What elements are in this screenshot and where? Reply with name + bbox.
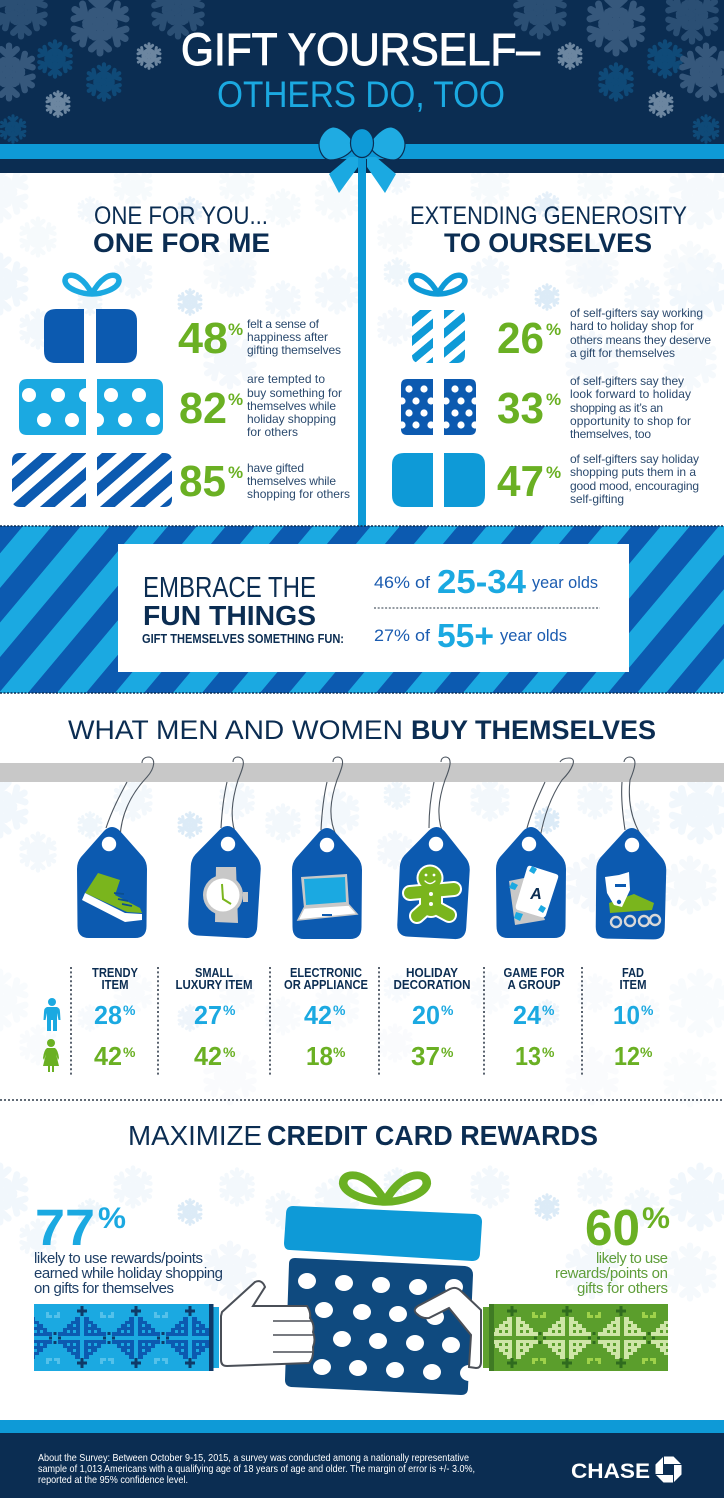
column: trendy item: TRENDY: [92, 965, 138, 980]
stat: 47 percent: 47: [497, 457, 544, 506]
stat: 33 percent: [497, 374, 691, 441]
icon: gift stack: [12, 275, 172, 507]
column: game for a group: %: [542, 1044, 555, 1060]
icon: watch: [203, 867, 248, 923]
heading: maximize credit card rewards: CREDIT CARD REWARDS: [267, 1120, 598, 1151]
heading: ONE FOR YOU...: [94, 202, 268, 230]
column: small luxury item: %: [223, 1002, 236, 1018]
survey note: About the Survey: Between October 9-15, 2015, a survey was conducted among a nationally representative: [38, 1452, 469, 1464]
column: electronic or appliance: %: [333, 1002, 346, 1018]
stat: 48 percent: %: [228, 320, 243, 339]
stat: 60 percent: 60: [585, 1199, 640, 1256]
stat: 60 percent: [555, 1199, 670, 1297]
column: fad item: ITEM: [620, 977, 646, 992]
stat: 26 percent: hard to holiday shop for: [570, 319, 694, 333]
panel: embrace the fun things: [0, 526, 724, 693]
tag: small luxury item: [187, 757, 263, 939]
column: fad item: %: [640, 1044, 653, 1060]
column: electronic or appliance: [284, 965, 368, 1071]
stat: 48 percent: happiness after: [247, 330, 328, 344]
stat: 82 percent: 82: [179, 384, 227, 433]
column: electronic or appliance: OR APPLIANCE: [284, 977, 368, 992]
stat: 82 percent: for others: [247, 425, 298, 439]
stat: 26 percent: %: [546, 320, 561, 339]
stat: 33 percent: shopping as it’s an: [570, 401, 663, 415]
heading: GIFT THEMSELVES SOMETHING FUN:: [142, 632, 344, 646]
stat: 77 percent: on gifts for themselves: [34, 1280, 174, 1297]
icon: blue sweater sleeve: [34, 1304, 219, 1371]
tag: holiday decoration: [396, 757, 472, 940]
heading: maximize credit card rewards: [128, 1120, 598, 1151]
heading: what men and women buy themselves: BUY THEMSELVES: [411, 715, 656, 745]
column: game for a group: A GROUP: [508, 977, 561, 992]
tag: electronic or appliance: [292, 757, 362, 939]
icon: gift box with hands: [221, 1175, 482, 1395]
column: small luxury item: 27: [194, 1000, 222, 1030]
stat: 33 percent: 33: [497, 384, 544, 433]
stat: 33 percent: %: [546, 390, 561, 409]
stat: 48 percent: [178, 314, 341, 363]
heading: maximize credit card rewards: MAXIMIZE: [128, 1120, 262, 1151]
column: holiday decoration: [394, 965, 470, 1071]
stat: 26 percent: others means they deserve: [570, 333, 711, 347]
title: OTHERS DO, TOO: [217, 74, 505, 115]
column: game for a group: GAME FOR: [504, 965, 565, 980]
column: fad item: 12: [614, 1041, 640, 1071]
stat: 77 percent: 77: [35, 1199, 95, 1256]
stat: 82 percent: [179, 372, 342, 439]
icon: playing cards: A: [529, 886, 542, 903]
gift body: [285, 1258, 473, 1395]
icon: right hand: [415, 1288, 481, 1368]
icon: green sweater sleeve: [483, 1304, 668, 1371]
stat: 33 percent: themselves, too: [570, 427, 651, 441]
stat: 77 percent: earned while holiday shopping: [34, 1265, 223, 1282]
stat: 60 percent: likely to use: [596, 1250, 668, 1267]
column: game for a group: [504, 965, 565, 1071]
vertical ribbon: [358, 159, 366, 526]
title: [181, 24, 540, 115]
stat: 26 percent: [497, 306, 711, 363]
icon: rollerblade: [605, 872, 660, 927]
column: electronic or appliance: 18: [306, 1041, 333, 1071]
icon: laptop: [298, 874, 357, 920]
column: trendy item: %: [123, 1002, 136, 1018]
white card: [118, 544, 629, 672]
stat: 82 percent: buy something for: [247, 386, 342, 400]
column: trendy item: 42: [94, 1041, 122, 1071]
column: game for a group: 24: [513, 1000, 542, 1030]
chart: what men and women buy table: [43, 965, 654, 1077]
tag: fad item: [595, 757, 667, 940]
stat: 82 percent: holiday shopping: [247, 412, 336, 426]
stat: 77 percent: [34, 1199, 223, 1297]
column: holiday decoration: %: [441, 1044, 454, 1060]
stat: 82 percent: themselves while: [247, 399, 336, 413]
icon: left hand: [221, 1281, 314, 1366]
stat: 25-34 year olds: [374, 563, 598, 600]
column: fad item: 10: [613, 1000, 640, 1030]
stat: 85 percent: have gifted: [247, 461, 304, 475]
stat: 60 percent: %: [642, 1202, 670, 1235]
title: GIFT YOURSELF–: [181, 24, 540, 75]
stat: 55+ year olds: 27% of: [374, 626, 430, 645]
column: electronic or appliance: %: [333, 1044, 346, 1060]
panel: one for you, one for me: [12, 202, 350, 507]
stat: 47 percent: of self-gifters say holiday: [570, 452, 699, 466]
stat: 82 percent: are tempted to: [247, 372, 325, 386]
hanger rail: [0, 763, 724, 782]
heading: [93, 202, 270, 258]
column: holiday decoration: HOLIDAY: [406, 965, 458, 980]
stat: 48 percent: 48: [178, 314, 228, 363]
column: small luxury item: SMALL: [195, 965, 233, 980]
column: holiday decoration: 20: [412, 1000, 440, 1030]
heading: [410, 202, 687, 258]
column: small luxury item: LUXURY ITEM: [176, 977, 252, 992]
column: electronic or appliance: 42: [304, 1000, 332, 1030]
gift lid: [284, 1206, 482, 1261]
logo: Chase: CHASE: [571, 1460, 650, 1483]
stat: 85 percent: %: [228, 463, 243, 482]
stat: 33 percent: opportunity to shop for: [570, 414, 691, 428]
heading: ONE FOR ME: [93, 228, 270, 258]
column: fad item: %: [641, 1002, 654, 1018]
stat: 25-34 year olds: 25-34: [437, 563, 527, 600]
stat: 25-34 year olds: 46% of: [374, 573, 430, 592]
stat: 85 percent: 85: [179, 457, 226, 506]
stat: 47 percent: shopping puts them in a: [570, 465, 696, 479]
stat: 77 percent: %: [98, 1202, 126, 1235]
stat: 47 percent: self-gifting: [570, 492, 624, 506]
heading: FUN THINGS: [143, 600, 316, 631]
stat: 85 percent: themselves while: [247, 474, 336, 488]
heading: TO OURSELVES: [444, 228, 652, 258]
column: holiday decoration: %: [441, 1002, 454, 1018]
heading: [142, 572, 344, 646]
heading: EXTENDING GENEROSITY: [410, 202, 687, 230]
stat: 55+ year olds: [374, 617, 567, 654]
column: small luxury item: %: [223, 1044, 236, 1060]
heading: what men and women buy themselves: WHAT MEN AND WOMEN: [68, 715, 403, 745]
stat: 26 percent: 26: [497, 314, 544, 363]
stat: 60 percent: rewards/points on: [555, 1265, 668, 1282]
column: fad item: [613, 965, 654, 1071]
stat: 33 percent: look forward to holiday: [570, 387, 691, 401]
tag: trendy item: [77, 757, 154, 938]
footer: [0, 1420, 724, 1498]
heading: what men and women buy themselves: [68, 715, 656, 745]
stat: 26 percent: of self-gifters say working: [570, 306, 703, 320]
survey note: reported at the 95% confidence level.: [38, 1474, 188, 1486]
icon: man: [44, 998, 60, 1031]
stat: 33 percent: of self-gifters say they: [570, 374, 684, 388]
stat: 47 percent: [497, 452, 699, 506]
icon: gingerbread man: [410, 864, 454, 916]
column: trendy item: %: [123, 1044, 136, 1060]
stat: 55+ year olds: year olds: [500, 626, 567, 645]
icon: sneaker: [82, 873, 142, 922]
stat: 60 percent: gifts for others: [577, 1280, 668, 1297]
column: small luxury item: 42: [194, 1041, 222, 1071]
column: fad item: FAD: [622, 965, 644, 980]
icon: ribbon bow: [319, 127, 405, 195]
icon: playing cards: [509, 866, 558, 925]
stat: 47 percent: good mood, encouraging: [570, 479, 699, 493]
stat: 55+ year olds: 55+: [437, 617, 494, 654]
stat: 82 percent: %: [228, 390, 243, 409]
column: trendy item: [92, 965, 138, 1071]
header banner: [0, 0, 724, 173]
icon: woman: [43, 1039, 59, 1072]
column: trendy item: ITEM: [102, 977, 128, 992]
icon: green bow: [343, 1175, 427, 1202]
column: small luxury item: [176, 965, 252, 1071]
heading: EMBRACE THE: [143, 572, 316, 604]
stat: 47 percent: %: [546, 463, 561, 482]
tag: game for a group: [496, 758, 573, 938]
column: electronic or appliance: ELECTRONIC: [290, 965, 363, 980]
column: game for a group: 13: [515, 1041, 541, 1071]
stat: 48 percent: felt a sense of: [247, 317, 320, 331]
stat: 26 percent: a gift for themselves: [570, 346, 675, 360]
stat: 77 percent: likely to use rewards/points: [34, 1250, 203, 1267]
stat: 85 percent: shopping for others: [247, 487, 350, 501]
column: holiday decoration: 37: [411, 1041, 440, 1071]
survey note: sample of 1,013 Americans with a qualifying age of 18 years of age and older. The margin of error is +/- 3.0%,: [38, 1463, 475, 1475]
logo: Chase: [571, 1456, 682, 1483]
column: game for a group: %: [542, 1002, 555, 1018]
striped band: [0, 526, 724, 693]
column: trendy item: 28: [94, 1000, 122, 1030]
icon: gift stack: [392, 275, 485, 507]
panel: extending generosity to ourselves: [392, 202, 711, 507]
survey note: [38, 1452, 475, 1486]
column: holiday decoration: DECORATION: [394, 977, 470, 992]
stat: 48 percent: gifting themselves: [247, 343, 341, 357]
stat: 85 percent: [179, 457, 350, 506]
stat: 25-34 year olds: year olds: [532, 573, 598, 592]
